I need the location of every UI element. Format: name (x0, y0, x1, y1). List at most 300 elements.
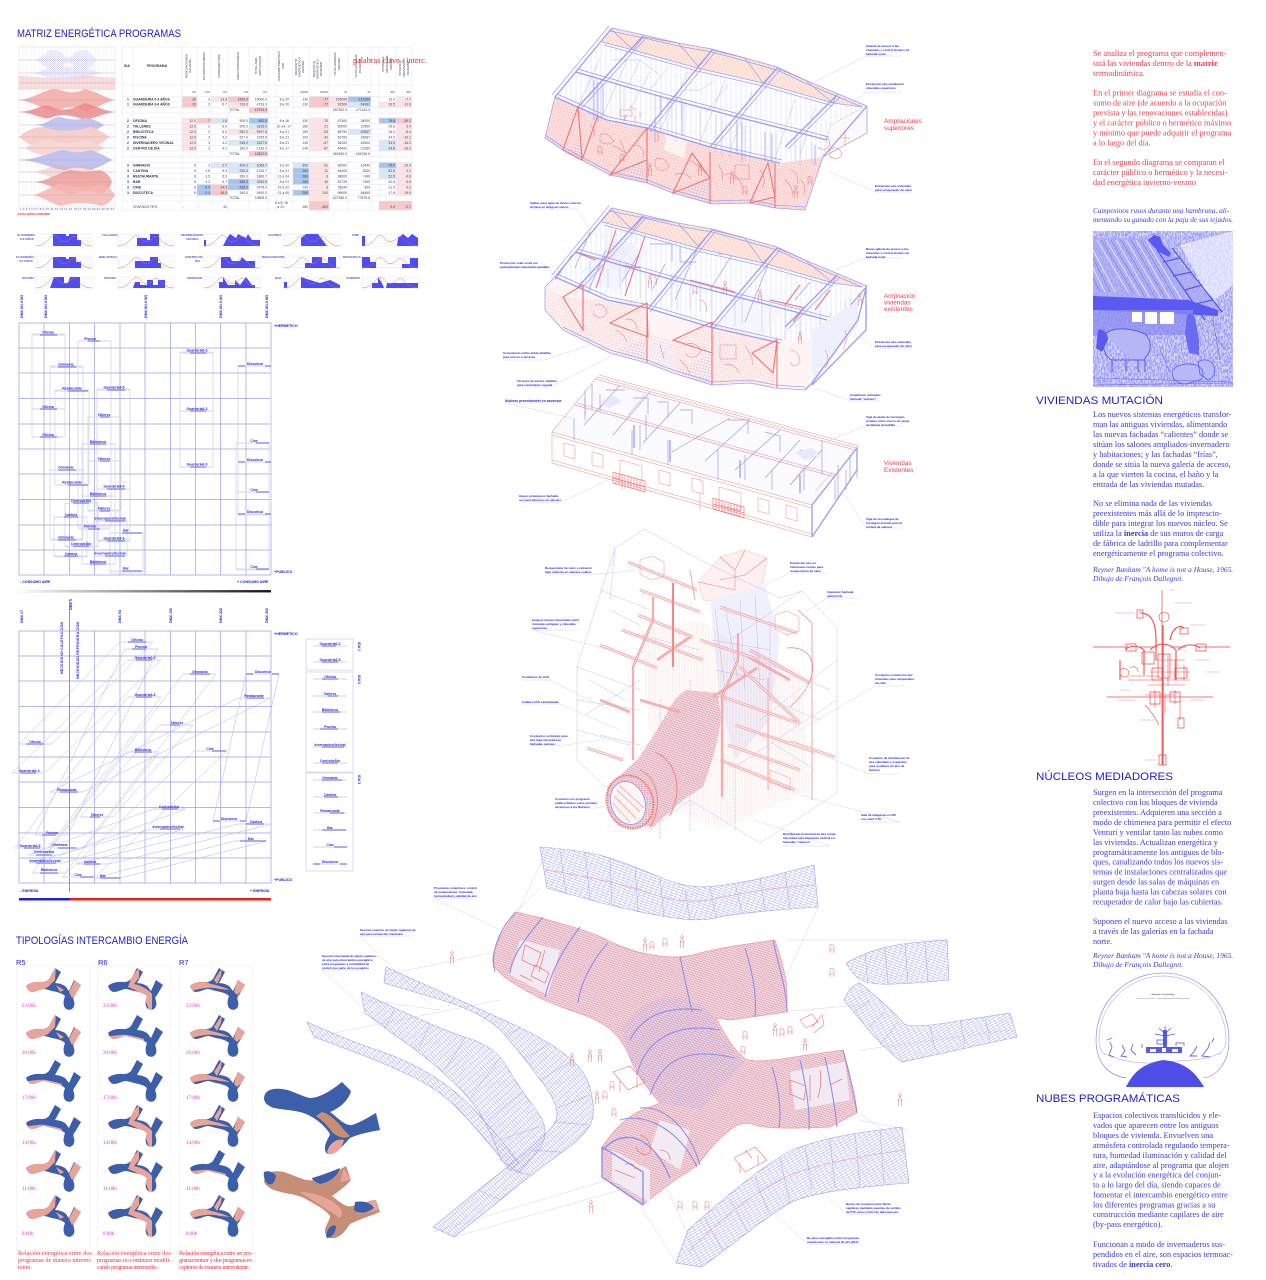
table header: VENTILACIÓN (257, 56, 262, 76)
table rows: CANTINA (133, 169, 149, 173)
table rows: 3 (208, 136, 210, 140)
callouts: núcleo: aire calentado y expulsión (869, 760, 907, 764)
table rows: 52.5 (388, 174, 395, 178)
table rows: 1500.0 (238, 98, 248, 102)
callouts: ampliaciones superiores: Galería de acceso a las (866, 44, 899, 48)
table rows: 24.0 (388, 136, 395, 140)
table rows: 1537.5 (257, 141, 267, 145)
program labels: Bar (100, 874, 107, 878)
text block: núcleos mediadores: Suponen el nuevo acceso a las viviendas (1093, 917, 1228, 926)
table rows: 35340 (338, 186, 347, 190)
program boxes: InvernaderoVecinal (94, 516, 126, 520)
callouts: núcleo: para usuflares de aire de (869, 764, 905, 768)
program labels: Cantina (84, 860, 96, 864)
callouts: nubes: de PVC para control de dimensiones (846, 1210, 899, 1214)
captions: tipologías: cando programa intermedio. (97, 1264, 158, 1271)
panel: programas por día: Cantina (324, 793, 336, 797)
panel: tipologías R6 (98, 958, 170, 1250)
capillary: right (846, 940, 949, 984)
panel: tipologías R7: 23:00h (186, 1004, 200, 1009)
panel: programas por día (306, 639, 361, 871)
table rows: TALLERES (133, 124, 151, 128)
callouts: núcleo: Conexión con programa (555, 797, 590, 801)
table header: ENERGÉTICO (314, 58, 320, 79)
callouts: ampliación viviendas: para recuperador de calor (875, 344, 913, 348)
table rows: 280 (302, 169, 308, 173)
callouts: nubes: control por parte de los usuarios (322, 966, 369, 970)
callouts: núcleo: Conductos de ACS (522, 675, 549, 679)
callouts: ampliación viviendas: Ampliación viviendas (850, 393, 881, 397)
table rows: -16.2 (403, 141, 411, 145)
table rows: 19 a 02 (278, 186, 289, 190)
chart labels: PISCINA (104, 276, 117, 280)
callouts: núcleo: Caldera ACS centralizada (522, 700, 559, 704)
chart labels: 3-6 AÑOS (19, 258, 33, 263)
table rows: CINE (133, 186, 142, 190)
table rows: 527.0 (240, 136, 248, 140)
text block: viviendas mutación: man las antiguas viviendas, alimentando (1093, 420, 1227, 429)
table rows: 14822.0 (255, 152, 267, 156)
outer edges (545, 277, 805, 390)
axis labels: diagram 2 columns: NECESIDAD CALEFACCIÓN (59, 622, 64, 674)
callouts: ampliación viviendas: Nueva galería de acceso a las (866, 247, 909, 251)
callouts: nubes: Sección intermedia de tejido capilares (322, 954, 377, 958)
callouts: viviendas existentes: hormigón armado para la (866, 521, 902, 525)
chart labels: 0-3 AÑOS (20, 236, 34, 241)
table rows: 3.4 (406, 124, 411, 128)
table rows: 6 (194, 174, 196, 178)
callouts: núcleo: viviendas para recuperador (875, 677, 915, 681)
tube openings (510, 940, 560, 995)
captions: tipologías: Relación energética entre un pro- (179, 1250, 253, 1257)
callouts: viviendas existentes (505, 399, 909, 529)
title: matriz energética: MATRIZ ENERGÉTICA PROGRAMAS (17, 27, 181, 40)
table rows: 285 (302, 191, 308, 195)
facade (545, 277, 823, 390)
table rows: 3 (208, 164, 210, 168)
table rows: 2530 (362, 169, 370, 173)
callouts: nubes: Sección superior de tejido capilares de (360, 928, 416, 932)
table rows: 6 (194, 186, 196, 190)
program boxes: Guarderia3-6 (104, 386, 125, 390)
thatched roof (1093, 238, 1218, 308)
text block: nubes programáticas: atmósfera controlada regulando tempera- (1093, 1141, 1230, 1150)
text block: núcleos mediadores: preexistentes. Adquieren una sección a (1093, 808, 1222, 817)
table rows: 8 a 21 (280, 136, 289, 140)
text block: nubes programáticas (1093, 1111, 1233, 1269)
chart labels: INVERNADERO (181, 233, 204, 237)
table rows: 160 (302, 124, 308, 128)
table header: W/L (390, 90, 396, 94)
chart labels: VIVIENDA (346, 276, 361, 280)
text block: viviendas mutación: las nuevas fachadas “calientes” donde se (1093, 430, 1229, 439)
table header: USUARIO (188, 59, 192, 73)
inner doodles (520, 945, 842, 1178)
table rows: BAR (133, 180, 141, 184)
program boxes: Talleres (98, 413, 110, 417)
table header: VERANO (389, 57, 393, 70)
program labels: Piscina (46, 831, 58, 835)
table rows: -77 (323, 98, 328, 102)
text block: núcleos mediadores: colectivo con los bloques de vivienda (1093, 798, 1218, 807)
table rows: INVERNADERO VECINAL (133, 141, 174, 145)
table rows: 6 (194, 191, 196, 195)
table rows: TOTAL (229, 196, 240, 200)
table rows: 6.6 (406, 180, 411, 184)
program boxes: Cantina (65, 552, 77, 556)
table rows: 8 a 20 (280, 98, 289, 102)
text block: matriz termodinámica: carácter público o hermético y la necesi- (1093, 168, 1228, 177)
table rows: 1 (127, 98, 129, 102)
lavender shaft (710, 585, 780, 760)
callouts: núcleo: fachadas salones (530, 742, 555, 746)
table rows: 3 (127, 169, 129, 173)
table header: REQUISITO (294, 58, 298, 75)
text block: viviendas mutación: No se elimina nada de las viviendas (1093, 499, 1212, 508)
table header: ÁREA PROGRAMAS (236, 52, 240, 80)
machine boxes (640, 556, 799, 790)
table rows: 15.6 (404, 191, 411, 195)
panel: tipologías R6: 20:00h (103, 1051, 117, 1056)
program boxes: Piscina (84, 524, 96, 528)
text block: nubes programáticas: fomentar el intercambio energético entre (1093, 1190, 1228, 1200)
text block: matriz termodinámica: prevista y las renovaciones establecidas) (1093, 108, 1228, 118)
table rows: 12.0 (189, 130, 196, 134)
table rows: 130 (302, 119, 308, 123)
chart labels: BAR (275, 276, 282, 280)
charts: occupancy small multiples (16, 232, 418, 288)
axis labels: diagram 2 columns: DMX 366 (265, 608, 269, 623)
callouts: ampliaciones superiores (814, 44, 913, 192)
table rows: 5440.0 (257, 191, 267, 195)
panel: programas por día: InvernaderoVecinal (314, 743, 346, 747)
tunnel mouth (599, 769, 661, 835)
program labels: Guarderia0-3 (135, 656, 156, 660)
table rows: 994 (364, 186, 370, 190)
sky (1180, 231, 1233, 300)
label: viviendas existentes: Existentes (884, 467, 913, 474)
axonometric: viviendas existentes (552, 375, 859, 537)
table rows: BIBLIOTECA (133, 130, 154, 134)
table rows: -16440 (359, 164, 370, 168)
table rows: 340.0 (240, 191, 248, 195)
table rows: 92300 (338, 102, 347, 106)
table rows: CENTRO DE DÍA (133, 146, 160, 150)
table rows: -41 (323, 164, 328, 168)
text block: matriz termodinámica: termodinámica. (1093, 69, 1145, 78)
panel: tipologías R7 (179, 958, 252, 1250)
callouts: nubes: hermeticidad y calidad de aire (434, 894, 477, 898)
panel: programas por día: Bar (327, 826, 334, 830)
caption: banham (1092, 565, 1233, 583)
caption: campesinos rusos: mentando su ganado con la paja de sus tejados. (1093, 215, 1233, 224)
callouts: ampliación viviendas: viviendas y control térmico de (866, 251, 910, 255)
chart: hermético-público vs consumo aire: - CONSUMO AIRE (20, 580, 51, 584)
table rows: -22067 (359, 136, 370, 140)
text block: núcleos mediadores: planta baja hasta las cabezas solares con (1093, 888, 1227, 896)
heading: tipologías intercambio energía: TIPOLOGÍAS INTERCAMBIO ENERGÍA (16, 934, 189, 947)
panel: tipologías R5: 14:00h (22, 1141, 36, 1146)
callouts: ampliaciones superiores: viviendas y control térmico de (866, 48, 910, 52)
caption: banham: Dibujo de François Dallegret. (1092, 960, 1183, 969)
table rows: 3125.0 (257, 124, 267, 128)
chart labels: TALLERES (102, 233, 118, 237)
chart labels: OFICINA (22, 276, 35, 280)
right arc (787, 648, 813, 707)
table rows: 3 (208, 98, 210, 102)
chests and beams (587, 562, 835, 790)
callouts: núcleo: con calor UTA (861, 817, 882, 821)
chart: hermético-público vs energía: - ENERGÍA (20, 888, 39, 893)
callouts: viviendas existentes: Viga de atado de hormigón (866, 415, 905, 419)
captions: tipologías (18, 1250, 253, 1271)
table header: INVIERNO (319, 61, 323, 76)
table rows: -34000 (359, 119, 370, 123)
program boxes: Biblioteca (90, 492, 106, 496)
cell shading (182, 96, 412, 210)
table rows: -11.6 (404, 102, 411, 106)
interior (580, 240, 650, 292)
callouts: núcleo: superiores (532, 626, 548, 630)
table rows: 2 (127, 146, 129, 150)
table rows: 7350 (362, 180, 370, 184)
chart: hermético-público vs energía (12, 600, 298, 900)
callouts: núcleo: chimeneas núcleo para (790, 565, 824, 569)
table rows: 100 (302, 186, 308, 190)
table header: L/H (192, 90, 196, 94)
table rows: 8 a 20 (280, 102, 289, 106)
text block: viviendas mutación: donde se sitúa la nueva galería de acceso, (1093, 460, 1231, 469)
table header: W/L (406, 90, 412, 94)
callouts: ampliación viviendas: fachada "salones" (850, 397, 877, 401)
table rows: 8 a 21 (280, 141, 289, 145)
program boxes: Talleres (98, 457, 110, 461)
table: programas (122, 47, 427, 210)
captions: tipologías: grama emisor y dos programas re- (179, 1257, 253, 1264)
table rows: 88750 (338, 130, 347, 134)
program labels: Cine (206, 747, 214, 751)
table rows: 84660 (361, 191, 370, 195)
table rows: 12.0 (189, 119, 196, 123)
table rows: 2.1 (406, 169, 411, 173)
table rows: TOTAL (229, 108, 240, 112)
table rows: 98000 (338, 174, 347, 178)
table header: PROGRAMA (147, 64, 168, 68)
program boxes: Bar (123, 566, 130, 570)
callouts: ampliación viviendas: Extracción aire viviendas (875, 340, 911, 344)
table rows: 8 a 21 (280, 130, 289, 134)
callouts: ampliaciones superiores: viviendas superiores (866, 86, 896, 90)
drawing: dome house: Anatomy of a dwelling (1151, 993, 1175, 996)
program labels: Discoteca (221, 817, 237, 821)
table rows: 4733.3 (257, 102, 267, 106)
callouts: nubes: Programas colectivos: control (434, 886, 477, 890)
callouts: núcleo: viviendas antiguas y viviendas (532, 622, 576, 626)
panel: tipologías R5: 17:00h (22, 1096, 36, 1101)
callouts: ampliación viviendas: para crecimiento vegetal (517, 383, 552, 387)
callouts: ampliaciones superiores: Extracción aire ventilación (866, 82, 904, 86)
capillary: lower right (676, 1127, 909, 1267)
table rows: 100 (302, 136, 308, 140)
text block: núcleos mediadores: ques, canalizando todos los nuevos sis- (1093, 858, 1223, 866)
panel: programas por día: Cine (326, 843, 334, 847)
table rows: 3 (208, 102, 210, 106)
table header: m²/H (204, 90, 210, 94)
red walls (575, 230, 830, 322)
text block: nubes programáticas: Espacios colectivos translúcidos y ele- (1093, 1111, 1221, 1120)
program boxes: Oficina (42, 405, 54, 409)
panel: tipologías R6: 8:00h (103, 1232, 115, 1237)
table rows: 2 (208, 124, 210, 128)
caption: banham: Reyner Banham "A home is not a House, 1965. (1092, 565, 1233, 574)
table rows: 14.3 (220, 186, 227, 190)
chimney (698, 550, 767, 603)
text block: nubes programáticas: aire, adaptándose al programa que alojen (1093, 1161, 1230, 1170)
text block: nubes programáticas: tivados de inercia cero. (1093, 1260, 1172, 1269)
program labels: CentrodeDía (34, 850, 54, 854)
capillary: left thin (307, 1022, 519, 1170)
chart labels (16, 232, 362, 280)
text block: nubes programáticas: to a lo largo del día, siendo capaces de (1093, 1180, 1221, 1190)
program boxes: Discoteca (247, 458, 263, 462)
x axis hours: 1 2 3 4 5 6 7 8 9 10 11 12 13 14 15 16 17 18 19 20 21 22 23 24 (20, 207, 114, 211)
callouts: viviendas existentes: cortina de salones (866, 525, 893, 529)
table rows: 350.0 (240, 174, 248, 178)
axis labels: diagram 2 columns: NECESIDAD REFRIGERACIÓN (75, 622, 80, 679)
axis labels: diagram 2 columns: DMX 54 (118, 610, 122, 623)
table rows: 145 (302, 141, 308, 145)
program labels: Cantina (250, 820, 262, 824)
callouts: núcleo (522, 561, 915, 846)
callouts: nubes: Nudos de conexión entre fibras (846, 1202, 891, 1206)
program boxes: Discoteca (247, 510, 263, 514)
panel: programas por día: Restaurante (320, 809, 340, 813)
table rows: 3 (127, 180, 129, 184)
table rows: 40 (324, 180, 328, 184)
program labels: Oficina (29, 740, 41, 744)
table rows: 75.0 (388, 164, 395, 168)
people and furniture (450, 936, 902, 1213)
program boxes: Gimnasio (58, 536, 74, 540)
chart labels: CANTINA (268, 233, 282, 237)
table rows: 8 a 21 (280, 169, 289, 173)
table rows: -77 (323, 102, 328, 106)
table header: ENERGÉTICO (296, 56, 302, 77)
table rows: 64400 (338, 169, 347, 173)
panel: tipologías R7: 8:00h (186, 1232, 198, 1237)
table header: VERANO (301, 60, 305, 73)
label: viviendas existentes: Viviendas (884, 460, 912, 467)
table rows: RESTAURANTE (133, 174, 159, 178)
table header: M2 (244, 90, 249, 94)
program boxes: Oficina (42, 433, 54, 437)
label: ampliación viviendas existentes: Ampliación (884, 293, 915, 300)
program boxes: Gimnasio (58, 362, 74, 366)
program labels: Biblioteca (41, 868, 57, 872)
program boxes: Piscina (84, 337, 96, 341)
caption: evolución consumo: EVOLUCIÓN CONSUMO (18, 211, 51, 216)
table rows: 36100 (338, 141, 347, 145)
table header: KH/M2 (320, 90, 329, 94)
red overlay keywords: palabras clave / interc. (353, 56, 427, 65)
caption: banham: Dibujo de François Dallegret. (1092, 574, 1183, 583)
program boxes: Guarderia0-3 (187, 348, 208, 352)
table rows: 1.8 (222, 119, 227, 123)
table rows: 8 a 16 (280, 119, 289, 123)
callouts: viviendas existentes: armado sobre muros de carga (866, 419, 909, 423)
table rows: 46400 (338, 146, 347, 150)
table rows: 6 (194, 164, 196, 168)
table rows: 10808.3 (255, 196, 267, 200)
table rows: 145 (302, 146, 308, 150)
text block: viviendas mutación: energéticamente el programa colectivo. (1093, 549, 1224, 558)
program boxes: Guarderia3-6 (104, 484, 125, 488)
program boxes: Guarderia0-3 (187, 407, 208, 411)
text block: nubes programáticas: y a la evolución energética del conjun- (1093, 1170, 1222, 1180)
table rows: -67 (323, 146, 328, 150)
callouts: núcleo: recuperación de calor (790, 569, 822, 573)
callouts: nubes: entre programas y posibilidad de (322, 962, 370, 966)
capillary: left long (384, 967, 593, 1237)
text block: viviendas mutación (1093, 410, 1232, 558)
axis labels: diagram 1 columns: DMX 8/1.9 M3 (219, 295, 223, 318)
table rows: 230.0 (240, 169, 248, 173)
axonometric: ampliaciones superiores (545, 26, 867, 210)
program labels: Restaurante (244, 694, 264, 698)
table header: L/S (263, 90, 267, 94)
captions: tipologías: Relación energética entre dos (18, 1250, 93, 1257)
energy scale bar (19, 898, 271, 900)
table rows: - (198, 205, 199, 209)
panel: tipologías R7: 14:00h (186, 1141, 200, 1146)
table rows: 130 (302, 102, 308, 106)
callouts: nubes: By-pass energético entre programas (807, 1236, 860, 1240)
table rows: 75.6 (388, 119, 395, 123)
program labels: Guarderia3-6 (135, 693, 156, 697)
table rows: 6.7 (222, 102, 227, 106)
panel: programas por día: Oficina (324, 675, 336, 679)
model: enlarged Y mostly pink (264, 1166, 380, 1238)
main tube (493, 912, 857, 1205)
table rows (127, 96, 411, 209)
table rows: -8.4 (405, 130, 411, 134)
table rows: 2 (127, 130, 129, 134)
panel: programas por día: Biblioteca (322, 708, 338, 712)
program boxes: Cine (250, 439, 258, 443)
table rows: 3 (127, 174, 129, 178)
person and ground (1185, 314, 1199, 355)
caption: banham: Reyner Banham "A home is not a House, 1965. (1092, 951, 1233, 960)
table rows: 13.3 (220, 98, 227, 102)
text block: núcleos mediadores (1093, 788, 1231, 946)
text block: nubes programáticas: vados que aparecen entre los antiguos (1093, 1121, 1219, 1130)
text block: matriz termodinámica: sumo de aire (de acuerdo a la ocupación (1093, 98, 1227, 108)
axonometric: nubes programáticas (307, 847, 1017, 1267)
table rows: 595.0 (240, 186, 248, 190)
label: ampliaciones superiores: Ampliaciones (884, 118, 922, 125)
text block: nubes programáticas: construcción mediante capilares de aire (1093, 1210, 1224, 1219)
program boxes: Discoteca (247, 362, 263, 366)
panel: programas por día: Discoteca (322, 860, 338, 864)
table header: HORARIO PREVISTO (277, 50, 281, 81)
text block: matriz termodinámica: Se analiza el programa que complemen- (1093, 49, 1227, 58)
table rows: -16.0 (403, 146, 411, 150)
text block: viviendas mutación: sitúan los salones ampliados-invernadero (1093, 440, 1230, 449)
table header: USO (281, 62, 285, 69)
program boxes: Restaurante (62, 480, 82, 484)
callouts: viviendas existentes: de fábrica de ladrillo (866, 423, 895, 427)
table rows: 3 (326, 186, 328, 190)
